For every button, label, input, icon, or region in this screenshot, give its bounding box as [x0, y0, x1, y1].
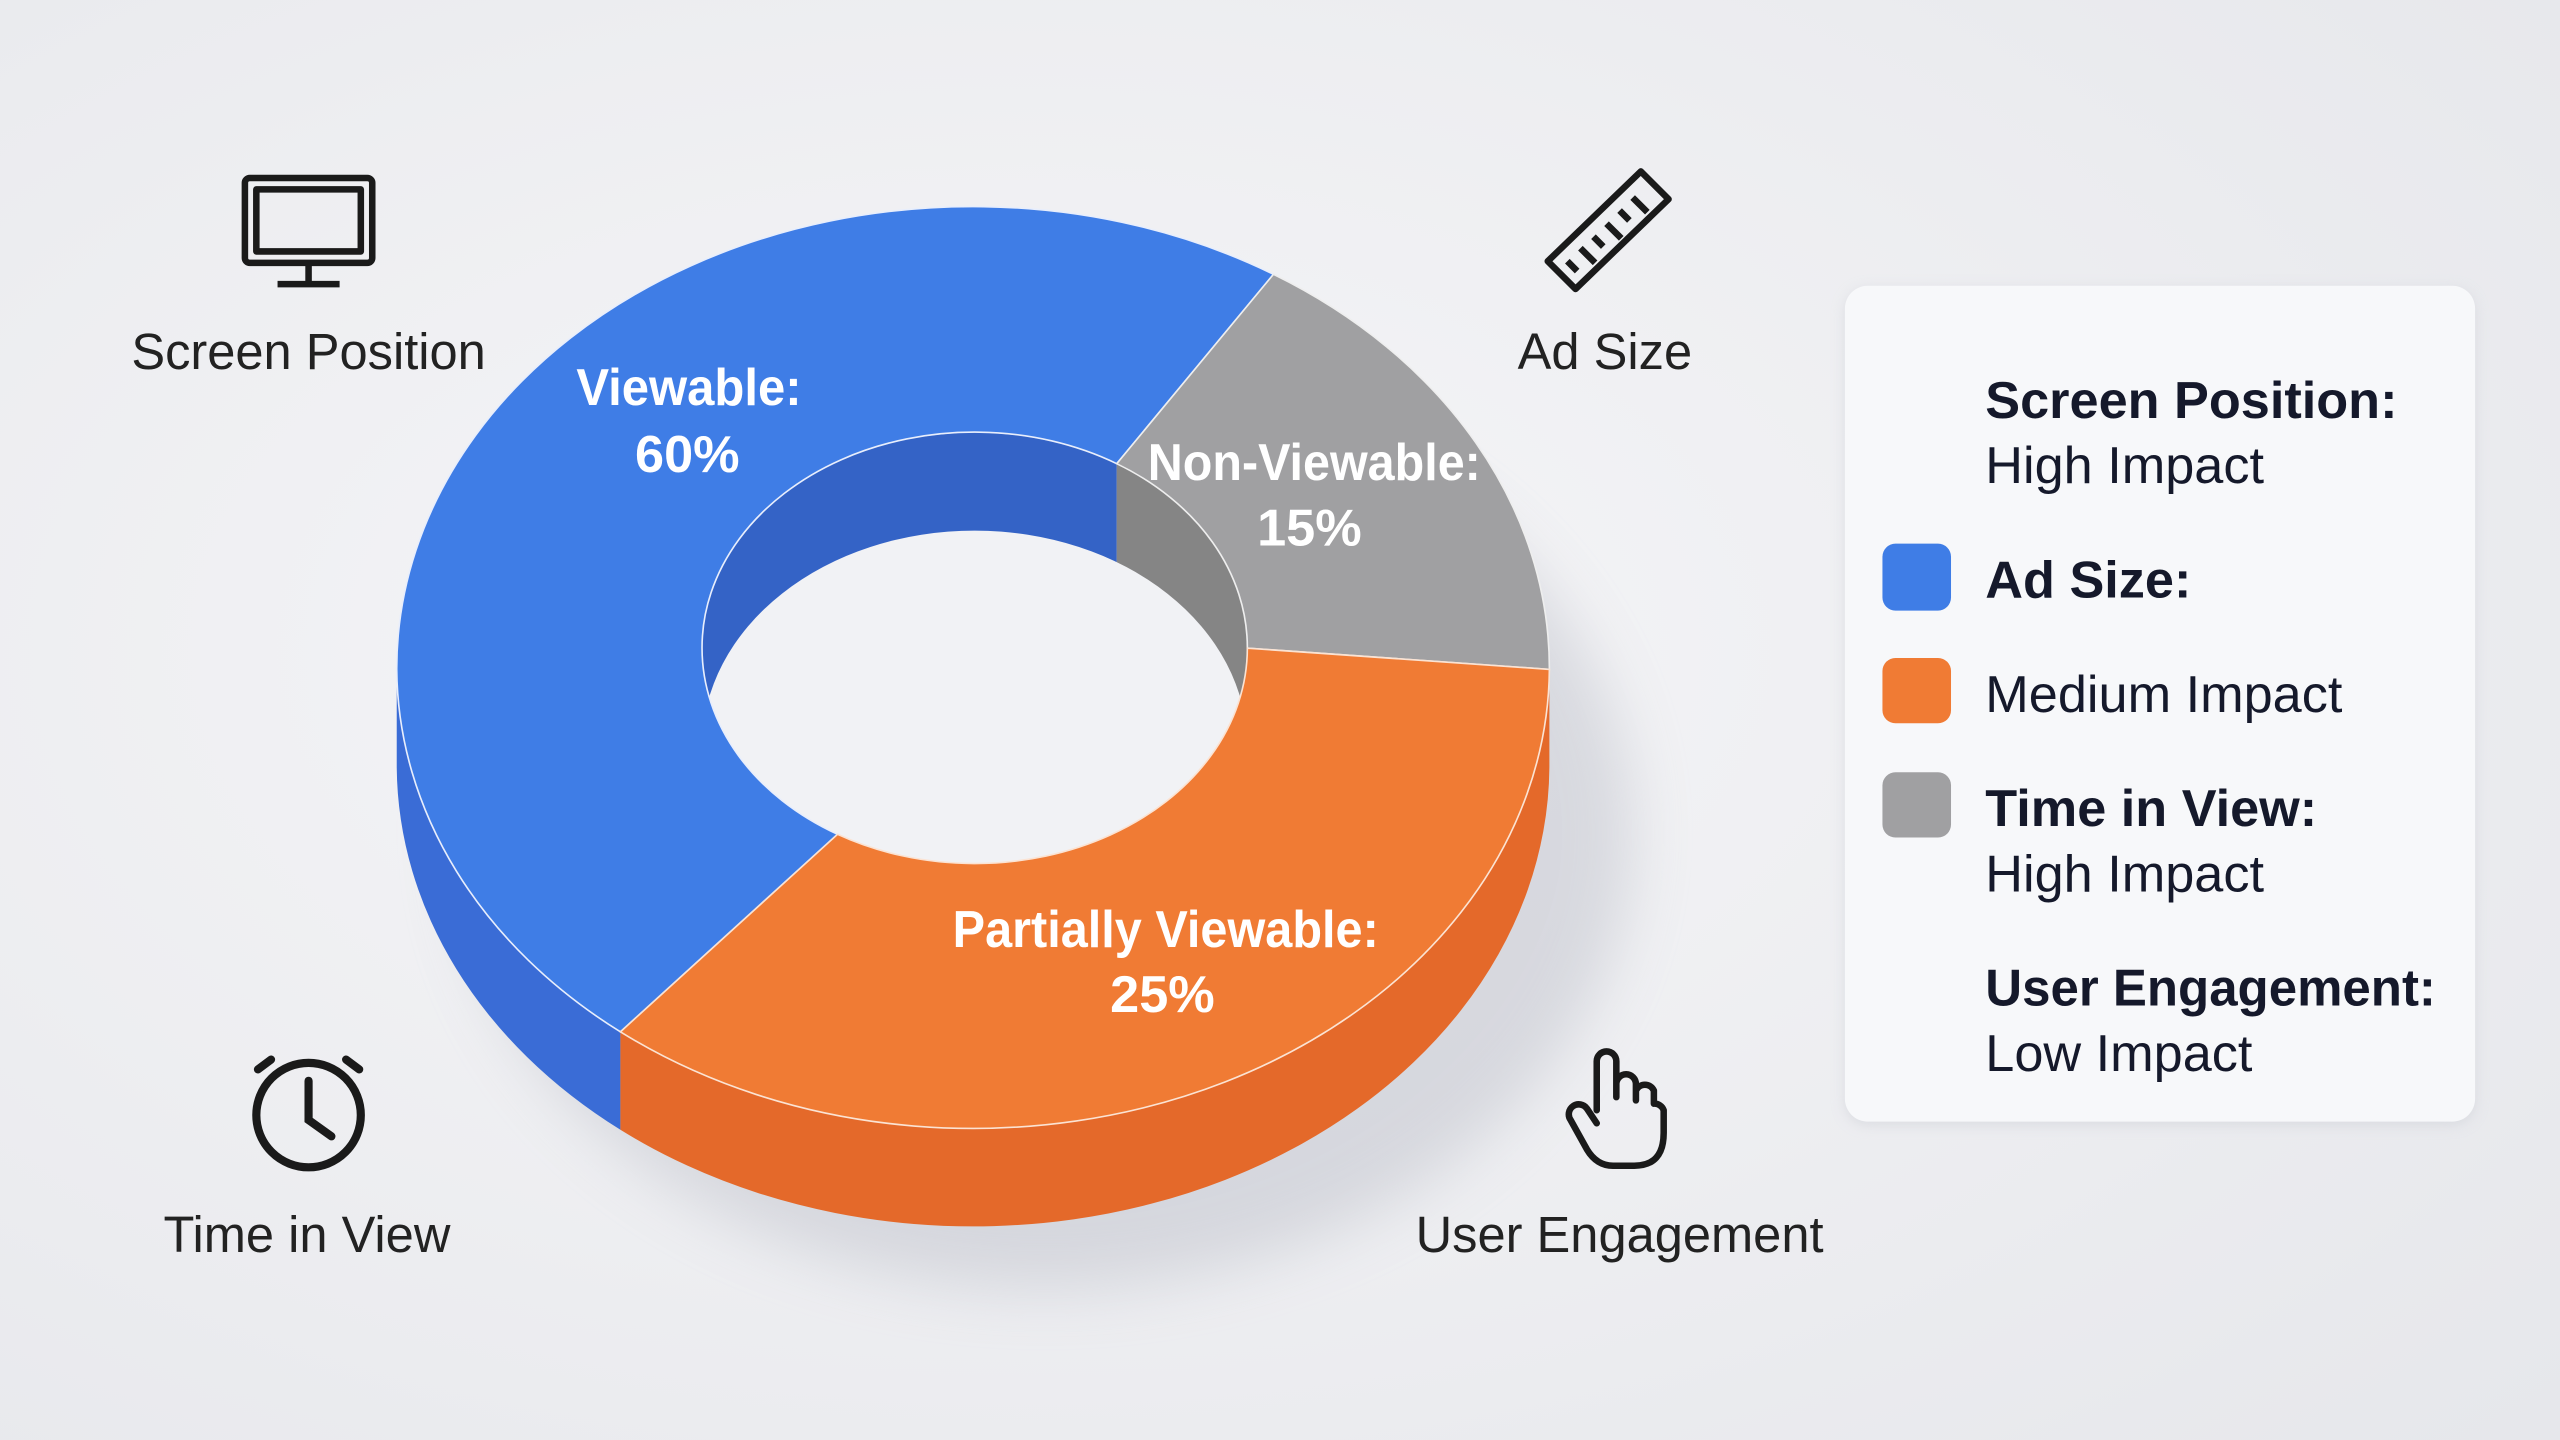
label: time in view: Time in View	[163, 1206, 451, 1263]
label: viewable: 60%	[635, 426, 740, 484]
label: non-viewable: 15%	[1257, 499, 1362, 557]
label: partially viewable	[953, 901, 1379, 1024]
label: non-viewable: Non-Viewable:	[1148, 434, 1481, 492]
legend panel	[1845, 286, 2475, 1125]
segment: non-viewable 15%	[1117, 274, 1549, 669]
legend: ad size: Ad Size:	[1985, 552, 2191, 610]
legend: ad size	[1882, 544, 2191, 611]
label: screen position: Screen Position	[131, 323, 486, 380]
icon: monitor	[245, 178, 372, 284]
label: partially viewable: 25%	[1110, 966, 1215, 1024]
icon: stopwatch	[256, 1060, 361, 1167]
side: blue	[397, 669, 620, 1130]
label: partially viewable: Partially Viewable:	[953, 901, 1379, 959]
icon: ruler	[1548, 171, 1669, 289]
label: viewable	[576, 359, 802, 484]
label: user engagement: User Engagement	[1416, 1206, 1824, 1263]
legend: screen position	[1985, 372, 2397, 495]
legend: user engagement	[1985, 960, 2436, 1083]
side: orange	[620, 669, 1549, 1226]
donut chart	[397, 207, 1633, 1290]
legend: screen position: High Impact	[1985, 437, 2264, 495]
legend: user engagement: Low Impact	[1985, 1025, 2253, 1083]
legend: screen position: Screen Position:	[1985, 372, 2397, 430]
label: non-viewable	[1148, 434, 1481, 557]
label: ad size: Ad Size	[1518, 323, 1692, 380]
legend: time in view: Time in View:	[1985, 780, 2317, 838]
hole	[702, 432, 1246, 863]
legend: medium impact	[1882, 658, 2343, 724]
legend: time in view	[1882, 772, 2317, 903]
segment: viewable 60%	[397, 207, 1273, 1032]
segment: partially viewable 25%	[620, 648, 1549, 1128]
legend: medium impact: Medium Impact	[1985, 666, 2343, 724]
label: viewable: Viewable:	[576, 359, 802, 417]
icon: pointing hand	[1569, 1051, 1664, 1166]
legend: user engagement: User Engagement:	[1985, 960, 2436, 1018]
legend: time in view: High Impact	[1985, 845, 2264, 903]
